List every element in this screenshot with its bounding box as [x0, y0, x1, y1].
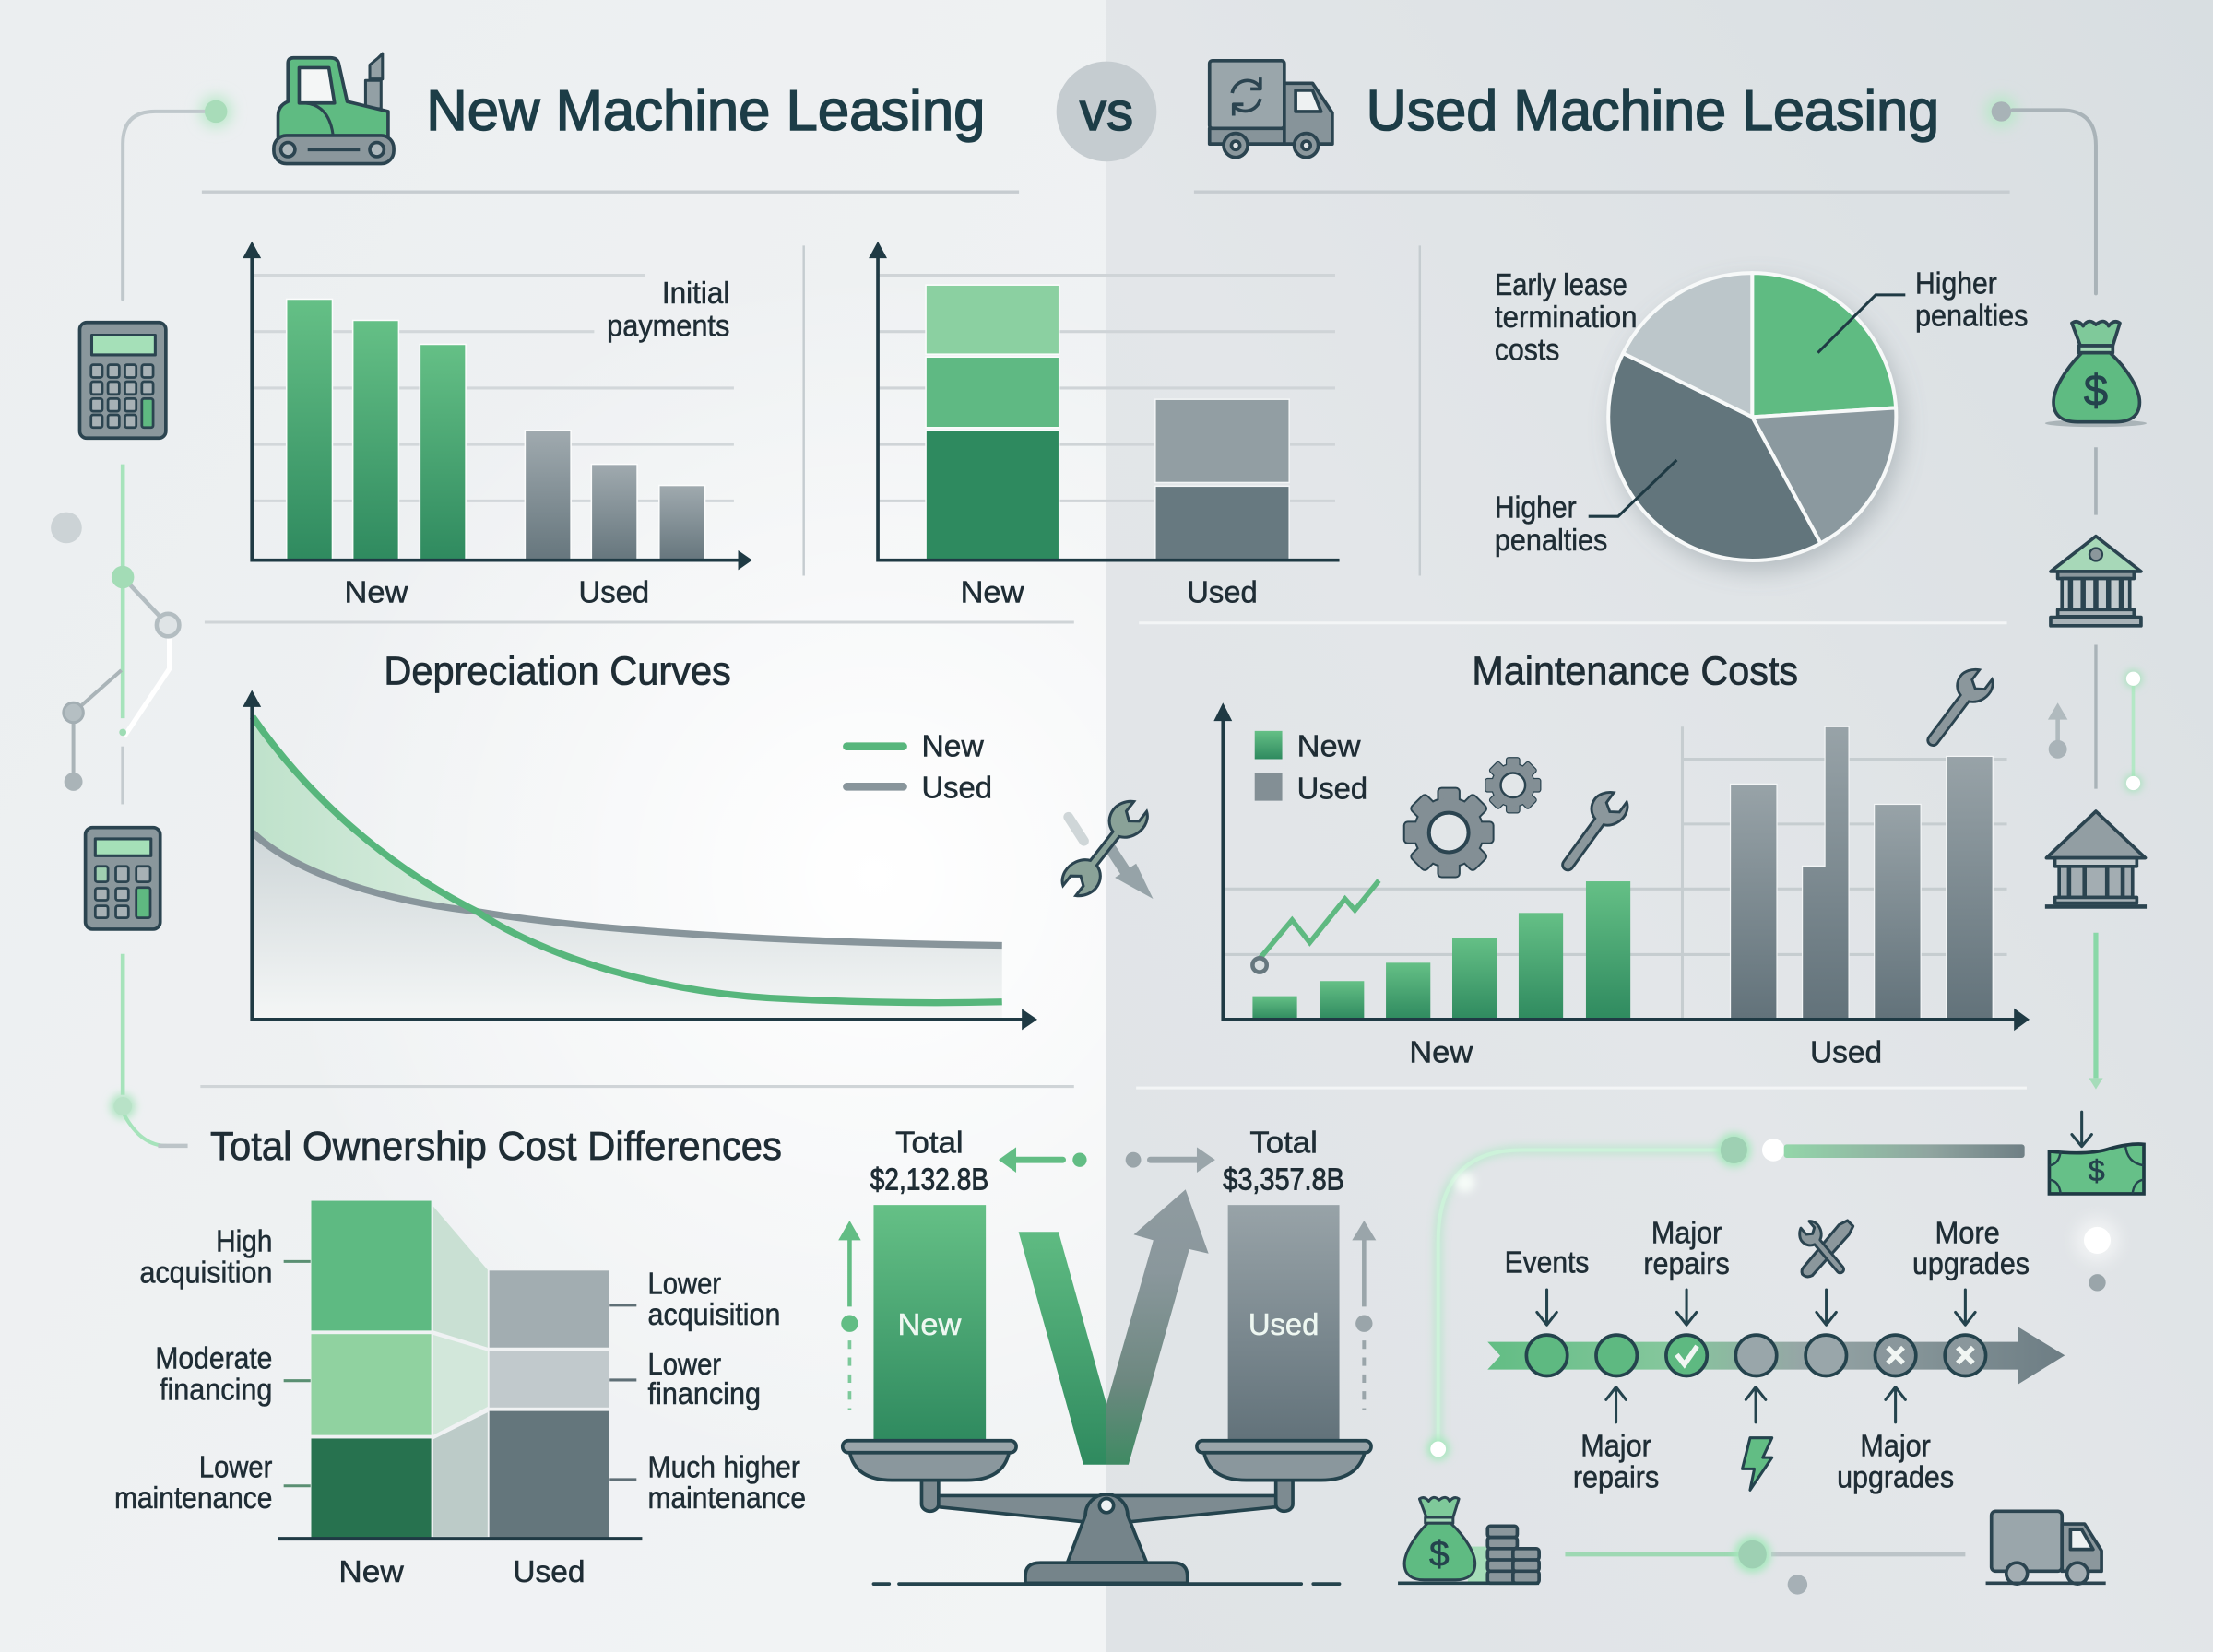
axes	[243, 690, 1037, 1030]
total: used: Total	[1249, 1127, 1318, 1161]
heading: maintenance costs: Maintenance Costs	[1472, 649, 1798, 693]
axis labels	[344, 576, 649, 610]
annotation: initial payments	[607, 277, 729, 343]
icon: bank lower	[2045, 811, 2147, 906]
arrow: left green	[999, 1147, 1087, 1173]
axes	[243, 242, 752, 570]
icon: excavator	[274, 53, 394, 164]
label: higher penalties right: penalties	[1915, 300, 2028, 334]
leader lines	[1589, 295, 1905, 516]
icon: money bag and coins: $	[1429, 1535, 1450, 1575]
label: major upgrades: Major	[1860, 1430, 1931, 1464]
labels: new components: maintenance	[114, 1481, 272, 1516]
label: early lease termination costs: termination	[1495, 301, 1638, 335]
left connector from header	[123, 96, 231, 299]
timeline: events along lease	[1487, 1216, 2065, 1494]
icon: calculator lower left	[86, 828, 160, 929]
label: higher penalties left: penalties	[1495, 524, 1607, 558]
panel: total ownership cost differences	[114, 1125, 806, 1589]
labels: used components: acquisition	[648, 1298, 780, 1332]
label: early lease termination costs: costs	[1495, 333, 1559, 367]
axis labels: Used	[579, 576, 649, 610]
background: right half	[1106, 0, 2213, 1652]
legend	[846, 729, 992, 806]
total: new: Total	[895, 1127, 964, 1161]
stack: used	[1155, 399, 1289, 560]
bar: used total	[1228, 1205, 1340, 1441]
label: major repairs top: Major	[1651, 1216, 1722, 1250]
icon: bank upper	[2051, 537, 2141, 626]
arrow: right gray	[1126, 1147, 1215, 1173]
label: more upgrades: upgrades	[1912, 1247, 2030, 1281]
vs badge: vs	[1080, 82, 1133, 142]
axis labels	[961, 576, 1258, 610]
big v arrow	[1019, 1189, 1209, 1465]
annotation: initial payments: payments	[607, 309, 729, 343]
labels: new components: High	[216, 1225, 272, 1259]
icon: wrench top	[1917, 663, 1997, 754]
heading: depreciation curves: Depreciation Curves	[384, 649, 731, 693]
icon: wrench mid	[1551, 785, 1632, 879]
axis labels: New	[961, 576, 1024, 610]
bars: used	[525, 431, 705, 560]
chart: stacked bars	[869, 242, 1340, 610]
labels: new components	[114, 1225, 272, 1516]
background: central glow	[268, 268, 1106, 1481]
chart: depreciation curves	[243, 649, 1037, 1030]
label: early lease termination costs	[1495, 268, 1638, 367]
bars: new	[1252, 881, 1630, 1020]
annotation: initial payments: Initial	[662, 277, 729, 311]
icon: delivery truck	[1210, 61, 1332, 158]
bars: new	[287, 299, 466, 560]
header: new machine leasing	[274, 53, 985, 164]
total: new	[870, 1127, 988, 1197]
pointers up	[1606, 1387, 1905, 1422]
axis labels: Used	[513, 1555, 585, 1589]
right side connectors	[2048, 644, 2142, 1090]
label: major repairs bottom: Major	[1580, 1430, 1651, 1464]
bar label: used: Used	[1249, 1308, 1319, 1342]
icon: money bag right	[2045, 322, 2147, 427]
icon: crossed tools	[1795, 1219, 1853, 1280]
curve: used	[253, 832, 1002, 946]
decorative dots right	[2075, 1218, 2120, 1292]
title: used machine leasing: Used Machine Leasing	[1367, 79, 1939, 143]
axis labels	[1409, 1036, 1882, 1070]
label: major repairs bottom	[1573, 1430, 1659, 1494]
labels: used components: Lower	[648, 1268, 721, 1302]
transition bands	[433, 1207, 488, 1537]
axis labels: Used	[1187, 576, 1258, 610]
icon: money bag and coins	[1398, 1497, 1539, 1583]
curve: new	[253, 717, 1002, 1003]
labels: used components	[648, 1268, 806, 1516]
labels: used components: Much higher	[648, 1451, 800, 1485]
pointers down	[1537, 1290, 1975, 1325]
bars: used	[1731, 726, 1993, 1020]
vs badge	[1057, 62, 1156, 161]
labels: used components: Lower	[648, 1348, 721, 1382]
icon: calculator top left	[79, 323, 166, 438]
icon: bill with arrow	[2049, 1112, 2144, 1194]
labels: new components: Lower	[199, 1451, 272, 1485]
legend	[1255, 729, 1367, 806]
panel: balance scale totals	[838, 1127, 1376, 1584]
legend: Used	[1297, 772, 1367, 806]
label: events: Events	[1505, 1246, 1589, 1280]
left lower connector to total ownership	[110, 954, 188, 1146]
balance scale	[843, 1441, 1371, 1584]
icon: bill with arrow: $	[2089, 1154, 2105, 1187]
legend: Used	[921, 772, 992, 806]
label: higher penalties right: Higher	[1915, 266, 1997, 301]
chart: maintenance costs	[1213, 649, 2030, 1070]
background: left half	[0, 0, 1106, 1652]
icon: small gear	[1485, 758, 1540, 812]
label: major repairs bottom: repairs	[1573, 1460, 1659, 1494]
axis labels	[338, 1555, 585, 1589]
right connector from header	[1986, 96, 2096, 293]
bar label: new: New	[897, 1308, 962, 1342]
green connector into timeline	[1426, 1133, 2025, 1460]
label: major repairs top	[1643, 1216, 1730, 1281]
label: higher penalties left: Higher	[1495, 491, 1577, 525]
heading: total ownership cost differences: Total Ownership Cost Differences	[210, 1125, 782, 1169]
legend: New	[921, 729, 985, 763]
timeline band	[1487, 1328, 2065, 1385]
label: major upgrades: upgrades	[1837, 1460, 1954, 1494]
icon: large gear	[1405, 789, 1493, 877]
icon: bottom truck	[1986, 1511, 2106, 1584]
pie chart: penalties and termination costs	[1495, 266, 2028, 560]
arrow: up green	[838, 1221, 861, 1410]
total: new: $2,132.8B	[870, 1162, 988, 1197]
label: major repairs top: repairs	[1643, 1247, 1730, 1281]
chart: initial payments bars	[243, 242, 752, 610]
bar: new total	[873, 1205, 986, 1441]
labels: new components: Moderate	[155, 1342, 272, 1376]
axis labels: New	[344, 576, 408, 610]
axis labels: New	[1409, 1036, 1473, 1070]
stack: used	[490, 1270, 609, 1538]
label: early lease termination costs: Early lease	[1495, 268, 1627, 302]
axes	[869, 242, 1340, 560]
total: used	[1223, 1127, 1344, 1197]
labels: used components: maintenance	[648, 1481, 806, 1516]
label: more upgrades: More	[1935, 1216, 2000, 1250]
stack: new	[312, 1201, 432, 1538]
left side network connectors	[51, 465, 179, 804]
axes	[1213, 702, 2030, 1031]
icon: money bag right: $	[2084, 366, 2108, 415]
header: used machine leasing	[1210, 61, 1939, 158]
axis labels: New	[338, 1555, 404, 1589]
labels: new components: financing	[160, 1373, 272, 1407]
stack: new	[926, 285, 1059, 560]
title: new machine leasing: New Machine Leasing	[426, 79, 985, 143]
icon: lightning bolt	[1743, 1438, 1772, 1490]
label: more upgrades	[1912, 1216, 2030, 1281]
total: used: $3,357.8B	[1223, 1162, 1344, 1197]
label: higher penalties left	[1495, 491, 1607, 558]
labels: used components: financing	[648, 1377, 761, 1411]
bottom progress line	[1565, 1536, 1965, 1595]
check and cross marks	[1676, 1346, 1973, 1364]
labels: new components: acquisition	[140, 1256, 272, 1290]
label: higher penalties right	[1915, 266, 2028, 334]
timeline markers	[1526, 1335, 1986, 1376]
icon: green trend line	[1252, 880, 1379, 973]
area fills	[253, 717, 1002, 1019]
label: major upgrades	[1837, 1430, 1954, 1494]
arrow: up gray	[1352, 1221, 1376, 1410]
icon: wrench and down arrow at center	[1058, 795, 1154, 903]
legend: New	[1297, 729, 1361, 763]
axis labels: Used	[1810, 1036, 1882, 1070]
